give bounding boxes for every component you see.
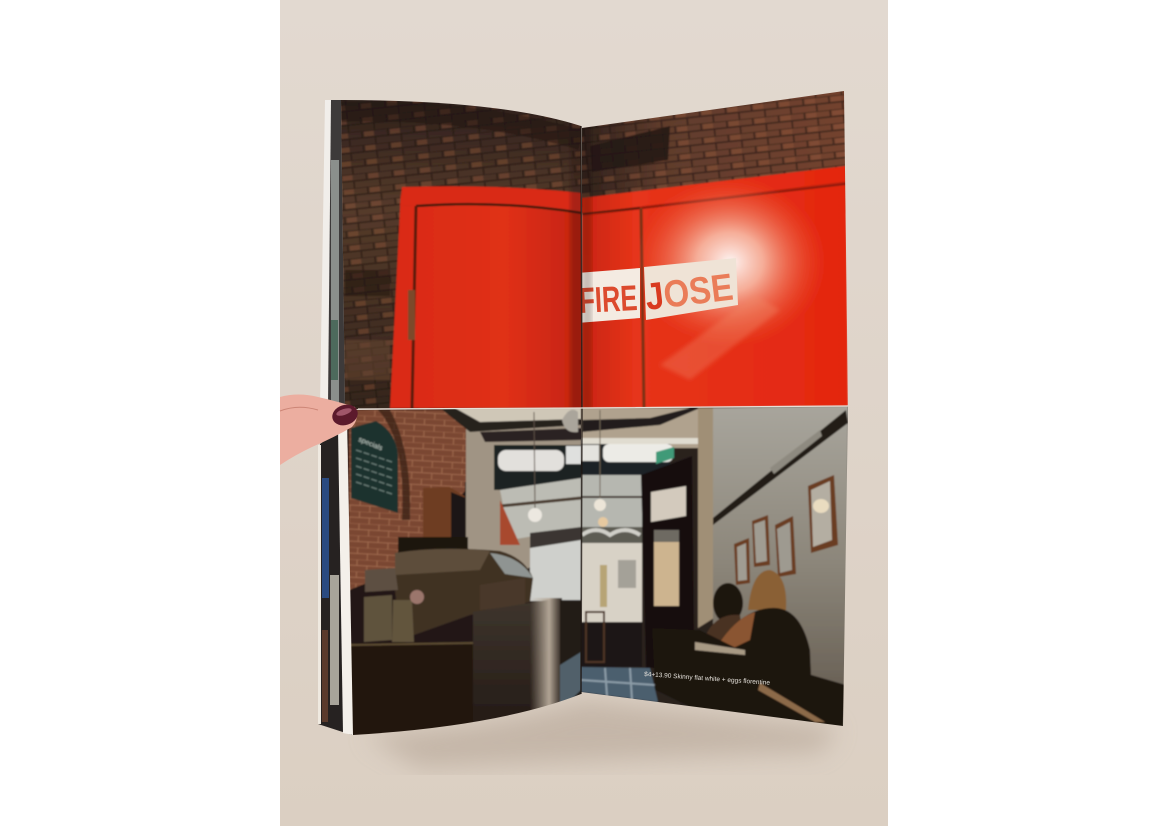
seated women <box>706 570 812 676</box>
street through window <box>580 543 642 625</box>
tiled floor <box>581 667 658 702</box>
tables and chairs <box>652 628 846 726</box>
espresso machine <box>398 537 468 553</box>
ceiling pendant <box>562 410 578 432</box>
stacked cups <box>464 482 466 498</box>
sign: FIRE JOSE: JOSE <box>643 267 735 319</box>
bottom left page: cafe counter with espresso machine <box>345 405 585 740</box>
cafe window display <box>530 535 581 601</box>
sign: FIRE JOSE <box>577 258 738 323</box>
top left page: red door and brick wall <box>335 95 585 415</box>
ceiling and doorway <box>580 408 700 448</box>
dark diagonal rail <box>713 410 848 525</box>
sign: FIRE JOSE: FIRE <box>578 277 638 321</box>
wall <box>713 406 848 726</box>
top right page: red door with FIRE JOSE sign <box>577 88 850 410</box>
spine gutter <box>581 126 582 694</box>
chalkboard menu: specials <box>357 436 384 453</box>
sign glare <box>642 185 824 340</box>
hand holding the magazine <box>280 394 360 465</box>
framed pictures <box>734 475 838 585</box>
doorway and window area <box>466 408 581 570</box>
brick wall <box>349 410 466 590</box>
corrugated roof <box>580 475 642 527</box>
page edges of the magazine <box>318 100 353 735</box>
counter <box>350 643 473 738</box>
hanging lamp <box>528 508 542 522</box>
milk jugs <box>364 595 392 642</box>
icon: exit sign <box>656 447 674 464</box>
air conditioner <box>651 486 686 522</box>
wooden cabinet <box>422 487 466 538</box>
photograph of an open magazine held against a wall <box>280 0 888 826</box>
bottom right page: cafe interior with seated women <box>580 405 850 730</box>
white gap between top and bottom photos <box>358 406 848 409</box>
caption: $4+13.90 Skinny flat white + eggs florentine <box>644 671 771 687</box>
beige pillar <box>698 408 714 628</box>
chalkboard menu <box>351 421 398 513</box>
iron lacework <box>580 527 642 543</box>
icon: painted fingernail <box>330 401 360 429</box>
page curve highlight at gutter <box>530 598 562 723</box>
wall background <box>280 0 888 826</box>
magazine shadow on wall <box>365 700 838 768</box>
shop front base <box>580 622 642 667</box>
black door <box>641 456 694 668</box>
